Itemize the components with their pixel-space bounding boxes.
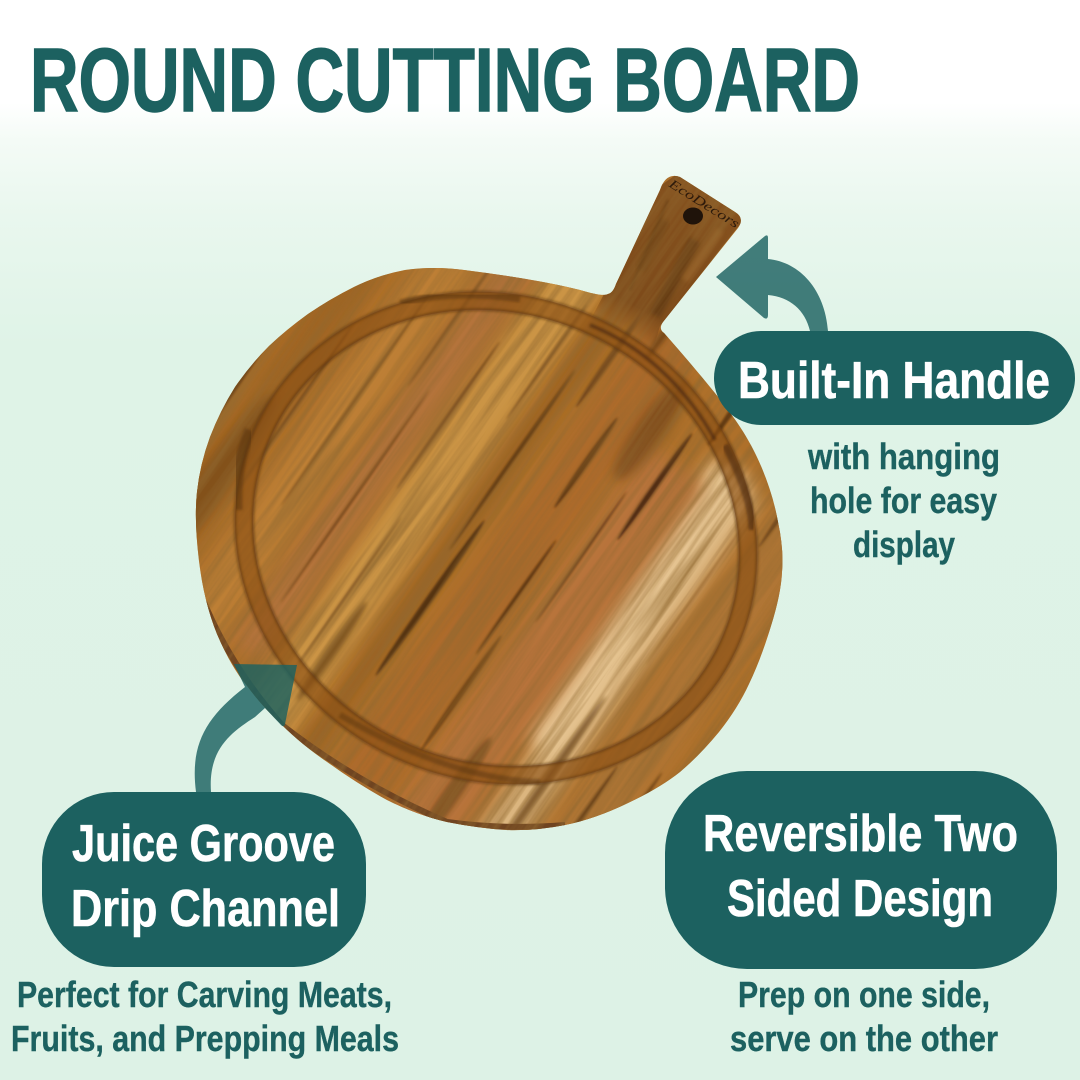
callout: juice groove (42, 792, 366, 967)
description: built-in handle: with hanging (807, 436, 1000, 477)
handle (594, 176, 741, 343)
callout: reversible design (665, 771, 1057, 969)
description: built-in handle (807, 436, 1000, 565)
hanging hole (683, 208, 703, 224)
description: juice groove: Perfect for Carving Meats, (17, 974, 392, 1015)
brand mark on handle: EcoDecors (665, 175, 742, 231)
juice groove channel (232, 289, 760, 787)
lower rim edge (204, 602, 565, 827)
description: reversible design: serve on the other (730, 1018, 998, 1059)
arrow: to handle (716, 235, 828, 331)
callout: reversible design: Sided Design (727, 870, 993, 928)
description: built-in handle: hole for easy (810, 480, 997, 521)
description: built-in handle: display (853, 524, 955, 565)
round wooden cutting board photo (196, 176, 782, 830)
description: juice groove (11, 974, 399, 1059)
description: reversible design (730, 974, 998, 1059)
callout: juice groove: Drip Channel (71, 880, 340, 938)
description: juice groove: Fruits, and Prepping Meals (11, 1018, 399, 1059)
callout: built-in handle (714, 331, 1075, 425)
arrow: to juice groove (195, 664, 297, 792)
description: reversible design: Prep on one side, (738, 974, 990, 1015)
callout: juice groove: Juice Groove (72, 815, 335, 873)
callout: reversible design: Reversible Two (703, 805, 1018, 863)
